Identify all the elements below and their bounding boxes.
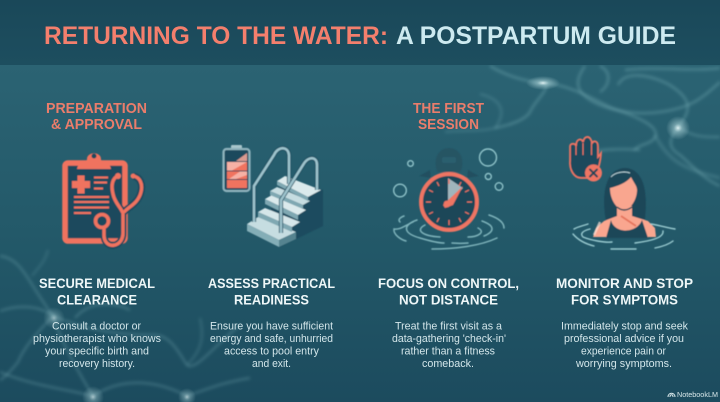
body: monitor and stop: worrying symptoms. — [575, 358, 672, 370]
section label: the first session: SESSION — [418, 116, 479, 133]
body: focus on control: data-gathering 'check-in' — [392, 333, 506, 345]
body: secure medical clearance: recovery history. — [59, 358, 135, 370]
body: assess practical readiness: and exit. — [252, 358, 291, 370]
icon: hand with stop badge — [570, 137, 602, 182]
water caustics: bottom left — [0, 250, 250, 396]
heading: monitor and stop: MONITOR AND STOP — [556, 275, 693, 291]
body: monitor and stop: Immediately stop and seek — [561, 320, 688, 332]
body: assess practical readiness: Ensure you have sufficient — [210, 320, 333, 332]
section label: preparation and approval: & APPROVAL — [51, 116, 142, 133]
icon: swimmer in water — [573, 168, 675, 249]
heading: focus on control — [378, 275, 519, 308]
icon part: ripples — [394, 215, 504, 249]
heading: assess practical readiness — [208, 275, 335, 308]
icon part: battery — [224, 145, 250, 191]
heading: assess practical readiness: READINESS — [234, 292, 309, 308]
icon: clipboard with stethoscope — [65, 153, 142, 245]
heading: secure medical clearance: CLEARANCE — [57, 292, 137, 308]
heading: focus on control: NOT DISTANCE — [399, 292, 498, 308]
heading: monitor and stop — [556, 275, 693, 308]
heading: secure medical clearance: SECURE MEDICAL — [39, 275, 155, 291]
icon: battery and pool steps — [224, 145, 323, 247]
icon part: bubbles — [394, 149, 503, 197]
heading: secure medical clearance — [39, 275, 155, 308]
section label: the first session: THE FIRST — [413, 100, 484, 117]
body: monitor and stop: experience pain or — [581, 346, 666, 358]
title: RETURNING TO THE WATER: — [44, 22, 388, 50]
column 4 text — [556, 275, 693, 370]
section label: preparation and approval — [46, 100, 147, 133]
column 3 text — [378, 275, 519, 370]
NotebookLM watermark: NotebookLM — [677, 392, 718, 399]
body: monitor and stop — [561, 320, 688, 370]
body: secure medical clearance: your specific birth and — [45, 346, 149, 358]
body: focus on control — [392, 320, 506, 370]
body: secure medical clearance — [33, 320, 161, 370]
header band — [0, 0, 720, 65]
icon part: stopwatch — [419, 148, 479, 230]
section label: the first session — [413, 100, 484, 133]
icon part: ripples around swimmer — [573, 224, 675, 249]
section label: preparation and approval: PREPARATION — [46, 100, 147, 117]
icon part: stairs — [247, 148, 323, 247]
title: A POSTPARTUM GUIDE — [396, 22, 676, 50]
body: focus on control: rather than a fitness — [401, 346, 495, 358]
body: monitor and stop: professional advice if you — [564, 333, 684, 345]
column 2 text — [208, 275, 335, 370]
heading: monitor and stop: FOR SYMPTOMS — [571, 292, 678, 308]
body: secure medical clearance: physiotherapist who knows — [33, 333, 161, 345]
column 1 text — [33, 275, 161, 370]
body: assess practical readiness — [210, 320, 333, 370]
body: secure medical clearance: Consult a doctor or — [52, 320, 141, 332]
icon: stopwatch in water — [394, 148, 504, 249]
body: focus on control: comeback. — [422, 358, 474, 370]
body: assess practical readiness: energy and safe, unhurried — [210, 333, 333, 345]
body: focus on control: Treat the first visit as a — [395, 320, 503, 332]
body: assess practical readiness: access to pool entry — [224, 346, 319, 358]
water caustics: top right — [445, 66, 720, 186]
water light glints — [43, 76, 690, 402]
heading: assess practical readiness: ASSESS PRACTICAL — [208, 275, 335, 291]
heading: focus on control: FOCUS ON CONTROL, — [378, 275, 519, 291]
